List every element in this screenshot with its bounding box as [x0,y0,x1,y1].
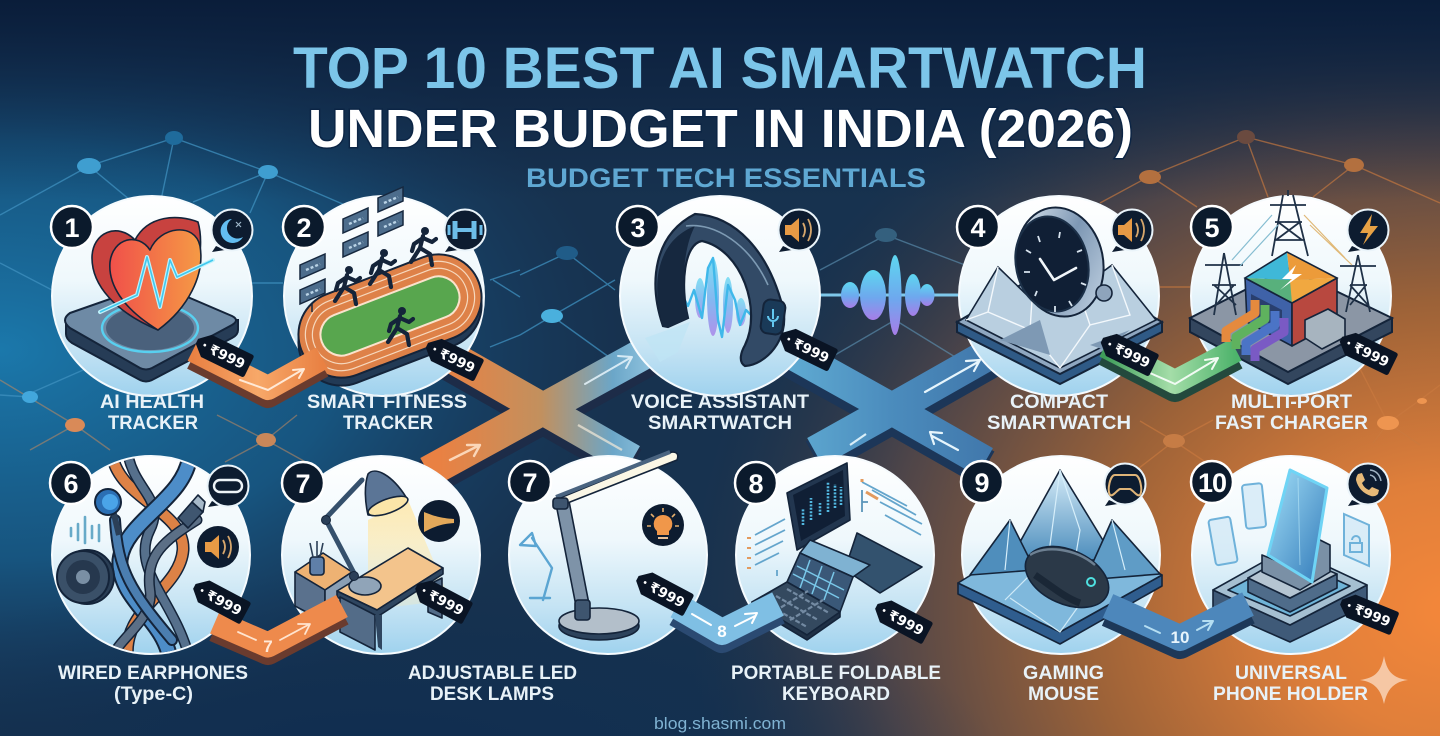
icon: speaker circle [197,526,239,568]
label [1215,392,1368,434]
panel 8: portable foldable keyboard [731,456,941,705]
icon: platform [1190,268,1392,384]
waveform between 3 and 4 [820,255,958,335]
label: GAMING [1023,663,1104,684]
label [58,663,248,705]
panel 7b: LED lamp [509,452,707,654]
connector: 9 to 10 [1108,604,1248,647]
icon: cabinet [295,541,352,622]
label [631,392,809,434]
disc [52,196,252,396]
panel 7: adjustable LED desk lamps (desk) [282,456,577,705]
price tag 10 [1336,591,1400,635]
icon: usb plug [178,495,205,528]
icon: phone call bubble [1348,464,1388,506]
title line 1: TOP 10 BEST AI SMARTWATCH [293,36,1147,101]
icon: watch [1007,199,1113,325]
icon: moon bubble [212,210,252,252]
icon: bolt bubble [1348,210,1388,252]
number badge 3 [617,206,659,248]
icon: beam circle [418,500,460,542]
label [987,392,1131,434]
disc [959,196,1159,396]
price tag 5 [1335,328,1399,376]
icon: small box [1305,309,1345,349]
number badge 10: 10 [1198,468,1226,498]
label: VOICE ASSISTANT [631,392,809,413]
number badge 6: 6 [63,469,79,499]
label: TRACKER [343,413,433,434]
icon: ice platform [957,262,1162,384]
icon: charger cube [1245,252,1337,346]
disc [509,456,707,654]
price tag 7: ₹999 [425,587,466,619]
price tag 5: ₹999 [1350,340,1391,371]
label: SMARTWATCH [648,413,792,434]
icon: track [286,242,494,398]
number badge 6 [50,462,92,504]
icon: pylons [1205,190,1376,315]
path number 10: 10 [1171,628,1189,647]
label: (Type-C) [114,684,193,705]
label [100,392,204,434]
icon: twisted cables [112,455,197,660]
icon: platform [958,520,1162,644]
icon: light cone [368,500,450,610]
icon: desk lamp [322,471,410,595]
panel 9: gaming mouse [958,456,1162,705]
price tag 10: ₹999 [1351,601,1393,631]
icon: small lamp outline [520,533,552,600]
number badge 9 [961,461,1003,503]
price tag 8 [871,595,933,645]
label [307,392,467,434]
path overlay into disc [645,322,690,362]
label: FAST CHARGER [1215,413,1368,434]
label: MULTI-PORT [1231,392,1352,413]
icon: base [1213,535,1367,642]
disc [1192,456,1390,654]
icon: phone [1268,470,1327,582]
icon: type-c bubble [208,466,248,507]
disc [620,196,820,396]
label [1213,663,1368,705]
icon: speaker bubble [1112,210,1152,252]
label: ADJUSTABLE LED [408,663,577,684]
number badge 2: 2 [296,213,312,243]
number badge 5 [1191,206,1233,248]
icon: mouse [1016,534,1118,620]
icon: sparkle [1360,656,1408,704]
footer url: blog.shasmi.com [654,714,786,733]
disc [282,456,480,654]
panel 4: compact smartwatch [957,196,1162,434]
panel 3: voice assistant smartwatch [617,196,820,434]
number badge 8: 8 [748,469,764,499]
path number 8: 8 [717,622,727,641]
number badge 4: 4 [970,213,986,243]
icon: speaker cone [57,550,114,604]
icon: mountains [970,470,1160,580]
icon: platform [65,284,238,382]
label: DESK LAMPS [430,684,554,705]
panel 10: universal phone holder [1191,456,1390,705]
label: PHONE HOLDER [1213,684,1368,705]
price tag 1 [191,330,255,378]
path number 7: 7 [263,637,273,656]
icon: runners [335,227,436,345]
price tag 4 [1096,329,1160,377]
label: UNIVERSAL [1235,663,1347,684]
label: SMART FITNESS [307,392,467,413]
label: COMPACT [1010,392,1108,413]
label: PORTABLE FOLDABLE [731,663,941,684]
price tag 6: ₹999 [203,587,244,619]
label: KEYBOARD [782,684,890,705]
panel 5: multi-port fast charger [1190,190,1392,434]
label [731,663,941,705]
price tag 7b: ₹999 [646,579,687,611]
number badge 7: 7 [295,469,311,499]
price tag 6 [189,575,251,625]
price tag 3: ₹999 [790,336,831,367]
icon: tablet panel [842,533,922,593]
crossing path left (orange to blue) [428,338,672,478]
icon: voice wave [670,258,752,337]
price tag 7 [411,575,473,625]
icon: monitor [787,463,850,550]
icon: earbud [95,489,121,535]
number badge 2 [283,206,325,248]
price tag 2: ₹999 [436,346,477,377]
panel 1: AI health tracker [51,196,252,434]
crossing path right (blue) [768,340,1010,468]
icon: band [656,214,786,366]
icon: speaker bubble [778,210,820,252]
number badge 1: 1 [64,213,80,243]
price tag 2 [421,334,485,382]
label: WIRED EARPHONES [58,663,248,684]
disc [962,456,1160,654]
icon: bulb circle [642,504,684,546]
icon: gamepad bubble [1104,464,1146,506]
icon: coloured cables from charger [1226,300,1284,361]
label: AI HEALTH [100,392,204,413]
disc [284,196,484,396]
icon: desk [337,548,443,650]
price tag 3 [775,324,839,372]
icon: foldable keyboard [752,540,870,640]
panel 6: wired earphones [50,455,250,705]
price tag 8: ₹999 [885,607,926,639]
icon: heart with pulse [92,218,213,330]
icon: dumbbell bubble [444,210,486,252]
connector: 4 to 5 [1105,346,1236,388]
icon: document lines [749,479,922,576]
price tag 7b [632,567,694,617]
network lines and nodes [0,130,1440,475]
number badge 7 [509,461,551,503]
number badge 8 [735,462,777,504]
price tag 4: ₹999 [1111,341,1152,372]
label [1023,663,1104,705]
icon: scoreboards [300,187,403,312]
disc [736,456,934,654]
title line 2: UNDER BUDGET IN INDIA (2026) [308,99,1133,159]
icon: LED lamp [553,452,678,640]
number badge 5: 5 [1204,213,1220,243]
number badge 9: 9 [974,468,990,498]
number badge 7: 7 [522,468,538,498]
connector: 7 to 8 [677,604,778,641]
connector: 1 to 2 [193,350,322,395]
number badge 4 [957,206,999,248]
label: TRACKER [108,413,198,434]
number badge 3: 3 [630,213,646,243]
number badge 1 [51,206,93,248]
number badge 10 [1191,461,1233,503]
icon: sound bars [71,517,99,543]
panel 2: smart fitness tracker [283,187,494,434]
title block [293,36,1147,193]
icon: ghost devices [1208,483,1369,566]
number badge 7 [282,462,324,504]
price tag 1: ₹999 [206,342,247,373]
disc [52,456,250,654]
subtitle: BUDGET TECH ESSENTIALS [526,163,926,193]
label: MOUSE [1028,684,1099,705]
label: SMARTWATCH [987,413,1131,434]
connector: 6 to 7 [215,606,342,656]
label [408,663,577,705]
disc [1191,196,1391,396]
